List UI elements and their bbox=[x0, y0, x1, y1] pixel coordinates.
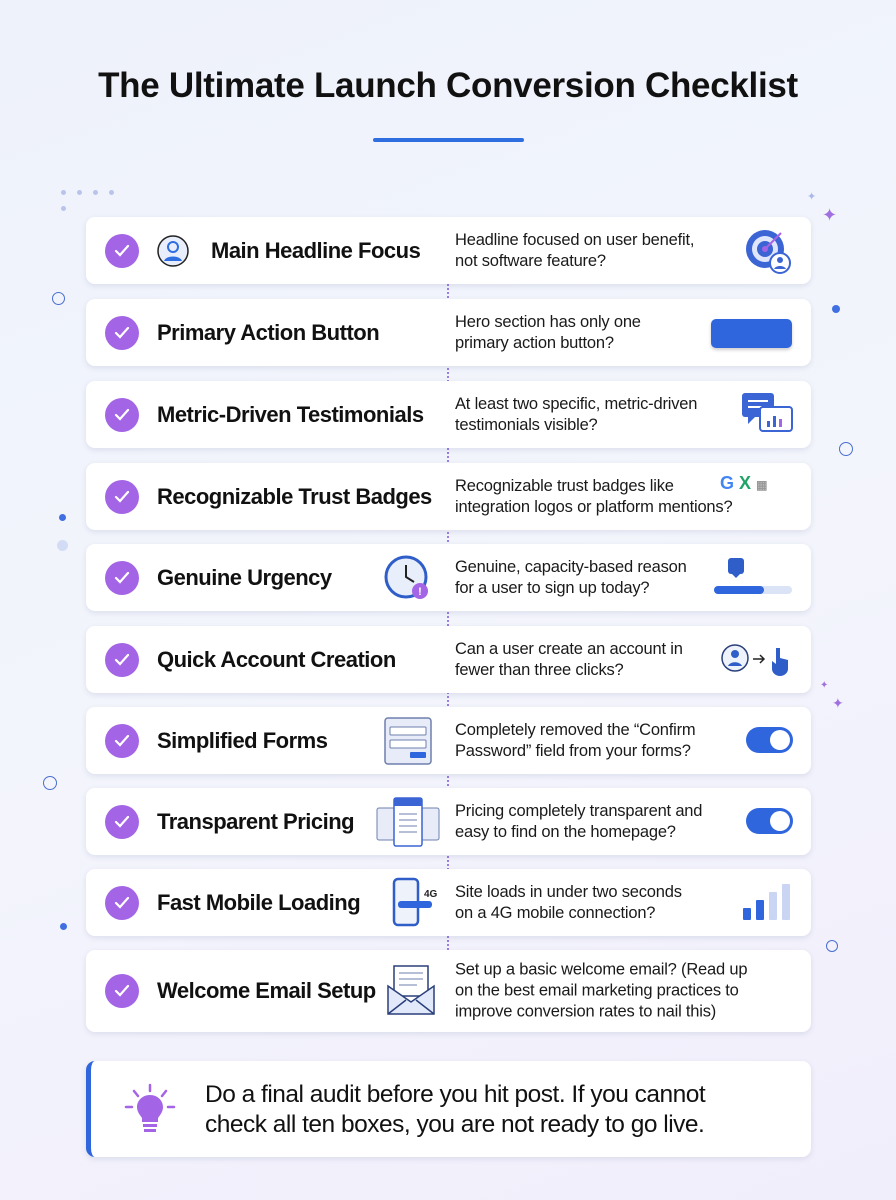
callout: Do a final audit before you hit post. If you cannot bbox=[205, 1081, 705, 1108]
card 4: Recognizable Trust Badges: Recognizable trust badges like bbox=[455, 476, 674, 494]
icon: pricing table bbox=[376, 797, 440, 847]
card 10: Welcome Email Setup: on the best email marketing practices to bbox=[455, 982, 739, 1000]
text: ✦ bbox=[807, 191, 816, 203]
icon: clock bbox=[384, 556, 428, 599]
icon: clock: ! bbox=[418, 586, 422, 598]
text: ✦ bbox=[820, 680, 828, 691]
card 5: Genuine Urgency: Genuine Urgency bbox=[157, 564, 332, 590]
card 2: Primary Action Button: primary action button? bbox=[455, 334, 614, 352]
card 7: Simplified Forms: Password” field from your forms? bbox=[455, 742, 691, 760]
card 10: Welcome Email Setup: Set up a basic welcome email? (Read up bbox=[455, 960, 747, 978]
icon: button bbox=[711, 319, 792, 348]
card 8: Transparent Pricing bbox=[86, 788, 811, 855]
card 3: Metric-Driven Testimonials: testimonials visible? bbox=[455, 416, 598, 434]
icon: signal bars bbox=[743, 884, 790, 920]
card 9: Fast Mobile Loading bbox=[86, 869, 811, 936]
icon: user bbox=[157, 235, 189, 267]
icon: toggle bbox=[746, 808, 793, 834]
card 1: Main Headline Focus: Headline focused on user benefit, bbox=[455, 230, 694, 248]
card 8: Transparent Pricing: Pricing completely transparent and bbox=[455, 802, 702, 820]
card 5: Genuine Urgency: Genuine, capacity-based reason bbox=[455, 558, 687, 576]
card 7: Simplified Forms: Simplified Forms bbox=[157, 728, 327, 752]
icon: user click bbox=[721, 644, 788, 676]
card 2: Primary Action Button: Hero section has only one bbox=[455, 312, 641, 330]
card 2: Primary Action Button: Primary Action Button bbox=[157, 320, 379, 344]
card 6: Quick Account Creation: Can a user create an account in bbox=[455, 640, 683, 658]
card 4: Recognizable Trust Badges bbox=[86, 463, 811, 530]
text: ✦ bbox=[832, 695, 844, 711]
decorative dots bbox=[61, 190, 114, 211]
card 4: Recognizable Trust Badges: Recognizable Trust Badges bbox=[157, 484, 432, 508]
icon: chat chart bbox=[742, 393, 793, 432]
icon: progress bbox=[714, 558, 792, 594]
card 7: Simplified Forms bbox=[86, 707, 811, 774]
callout: check all ten boxes, you are not ready to go live. bbox=[205, 1111, 704, 1138]
card 10: Welcome Email Setup: improve conversion rates to nail this) bbox=[455, 1002, 716, 1020]
card 6: Quick Account Creation bbox=[86, 626, 811, 693]
card 3: Metric-Driven Testimonials: Metric-Driven Testimonials bbox=[157, 402, 424, 426]
callout bbox=[86, 1061, 811, 1157]
card 2: Primary Action Button bbox=[86, 299, 811, 366]
card 1: Main Headline Focus: Main Headline Focus bbox=[211, 238, 420, 262]
icon: lightbulb bbox=[124, 1084, 176, 1132]
icon: phone 4G: 4G bbox=[424, 889, 438, 900]
card 10: Welcome Email Setup: Welcome Email Setup bbox=[157, 978, 376, 1003]
icon: envelope bbox=[387, 965, 435, 1015]
card 3: Metric-Driven Testimonials: At least two specific, metric-driven bbox=[455, 394, 697, 412]
card 7: Simplified Forms: Completely removed the “Confirm bbox=[455, 720, 695, 738]
icon: target bbox=[746, 230, 791, 274]
card 1: Main Headline Focus: not software feature? bbox=[455, 252, 606, 270]
card 5: Genuine Urgency bbox=[86, 544, 811, 611]
icon: form bbox=[384, 717, 432, 765]
card 1: Main Headline Focus bbox=[86, 217, 811, 284]
card 4: Recognizable Trust Badges: integration logos or platform mentions? bbox=[455, 498, 732, 516]
icon: logos: G X ▦ bbox=[720, 473, 767, 493]
card 8: Transparent Pricing: easy to find on the homepage? bbox=[455, 822, 676, 840]
card 9: Fast Mobile Loading: on a 4G mobile connection? bbox=[455, 904, 655, 922]
card 3: Metric-Driven Testimonials bbox=[86, 381, 811, 448]
icon: phone 4G bbox=[392, 878, 438, 926]
text: ✦ bbox=[822, 205, 837, 225]
card 6: Quick Account Creation: Quick Account Creation bbox=[157, 646, 396, 672]
title: The Ultimate Launch Conversion Checklist bbox=[98, 66, 798, 105]
card 9: Fast Mobile Loading: Fast Mobile Loading bbox=[157, 890, 360, 914]
card 9: Fast Mobile Loading: Site loads in under two seconds bbox=[455, 882, 682, 900]
icon: toggle bbox=[746, 727, 793, 753]
card 8: Transparent Pricing: Transparent Pricing bbox=[157, 808, 354, 834]
card 6: Quick Account Creation: fewer than three clicks? bbox=[455, 660, 624, 678]
card 10: Welcome Email Setup bbox=[86, 950, 811, 1032]
card 5: Genuine Urgency: for a user to sign up today? bbox=[455, 578, 649, 596]
